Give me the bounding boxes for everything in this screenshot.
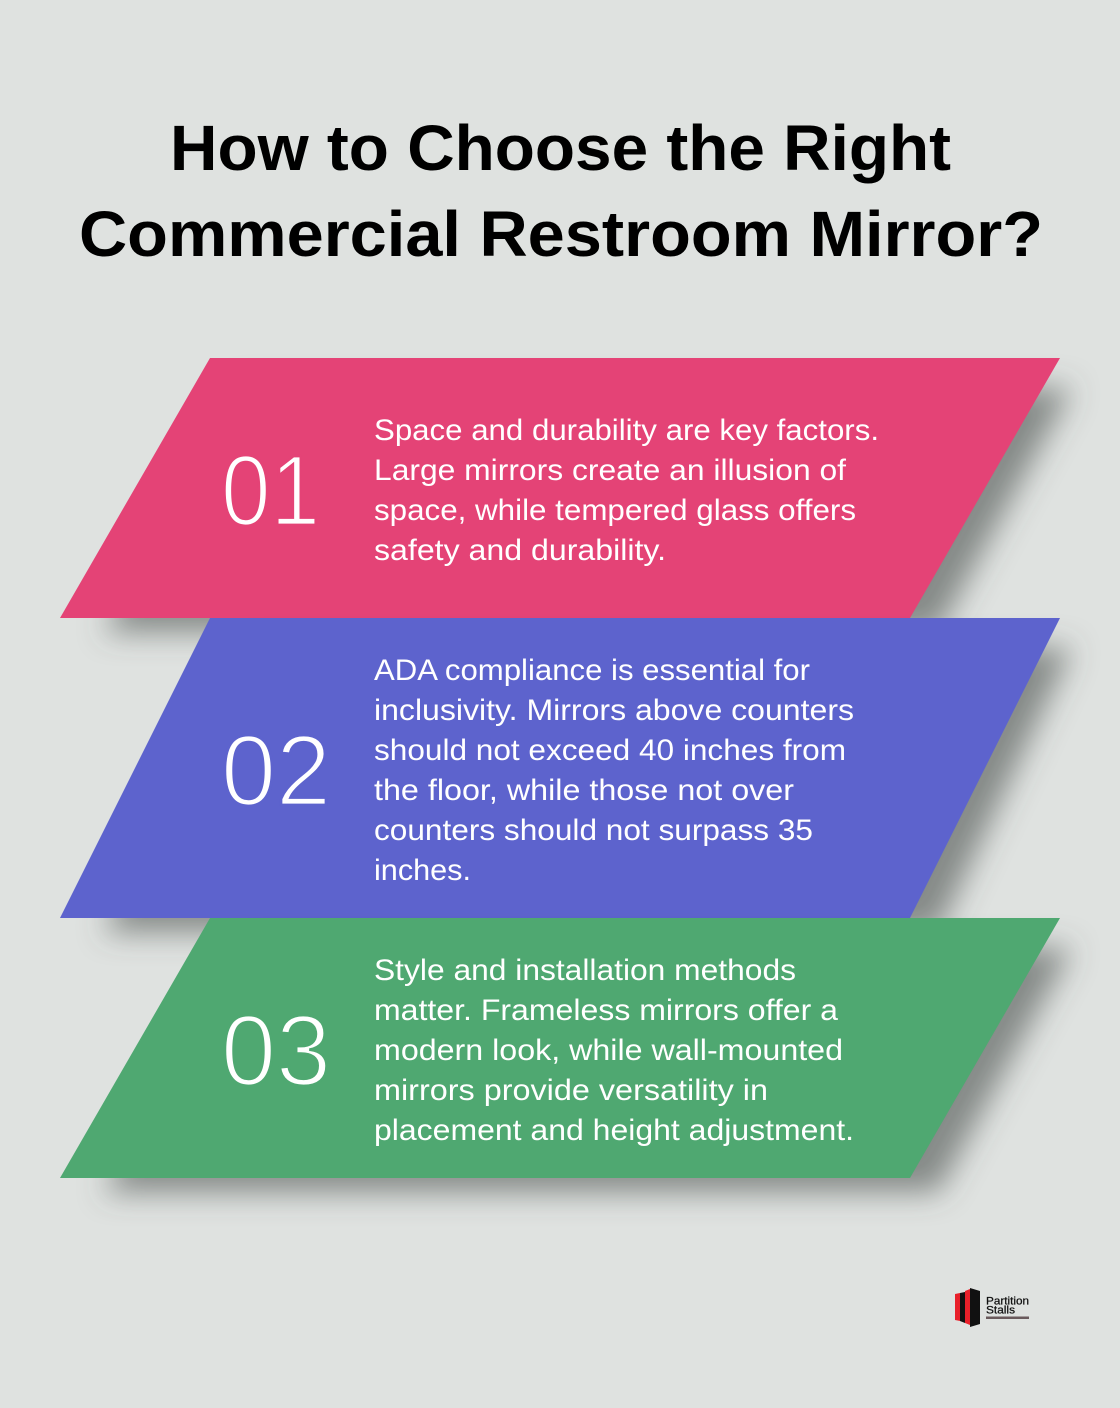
text: step 02 description: counters should not surpass 35 (374, 814, 813, 847)
text: step 01 description: space, while tempered glass offers (374, 494, 856, 527)
text: step 01 description (374, 414, 879, 567)
text: step 01 description: Large mirrors create an illusion of (374, 454, 847, 487)
text: step 03 description: placement and height adjustment. (374, 1114, 854, 1147)
logo: Partition Stalls: Partition (986, 1296, 1029, 1308)
title: How to Choose the Right (170, 112, 951, 184)
text: step 02 description: ADA compliance is essential for (374, 654, 810, 687)
logo: Partition Stalls: Stalls (986, 1304, 1016, 1316)
text: step 02 description: inches. (374, 854, 471, 887)
text: step 02 description (374, 654, 854, 887)
text: step 01 description: Space and durability are key factors. (374, 414, 879, 447)
text: step 03 description: Style and installation methods (374, 954, 796, 987)
number 01: 01 (221, 435, 320, 547)
number 02: 02 (221, 715, 331, 827)
text: step 03 description: matter. Frameless mirrors offer a (374, 994, 838, 1027)
text: step 03 description: modern look, while wall-mounted (374, 1034, 843, 1067)
text: step 02 description: the floor, while those not over (374, 774, 794, 807)
panel: step 01 (60, 358, 1072, 632)
text: step 01 description: safety and durability. (374, 534, 666, 567)
logo: Partition Stalls (955, 1288, 1029, 1327)
title (79, 112, 1043, 270)
text: step 03 description: mirrors provide versatility in (374, 1074, 768, 1107)
text: step 03 description (374, 954, 854, 1147)
number 03: 03 (221, 995, 331, 1107)
panel: step 03 (60, 918, 1072, 1192)
panel: step 02 (60, 618, 1072, 932)
text: step 02 description: should not exceed 40 inches from (374, 734, 846, 767)
title: Commercial Restroom Mirror? (79, 198, 1043, 270)
text: step 02 description: inclusivity. Mirrors above counters (374, 694, 854, 727)
